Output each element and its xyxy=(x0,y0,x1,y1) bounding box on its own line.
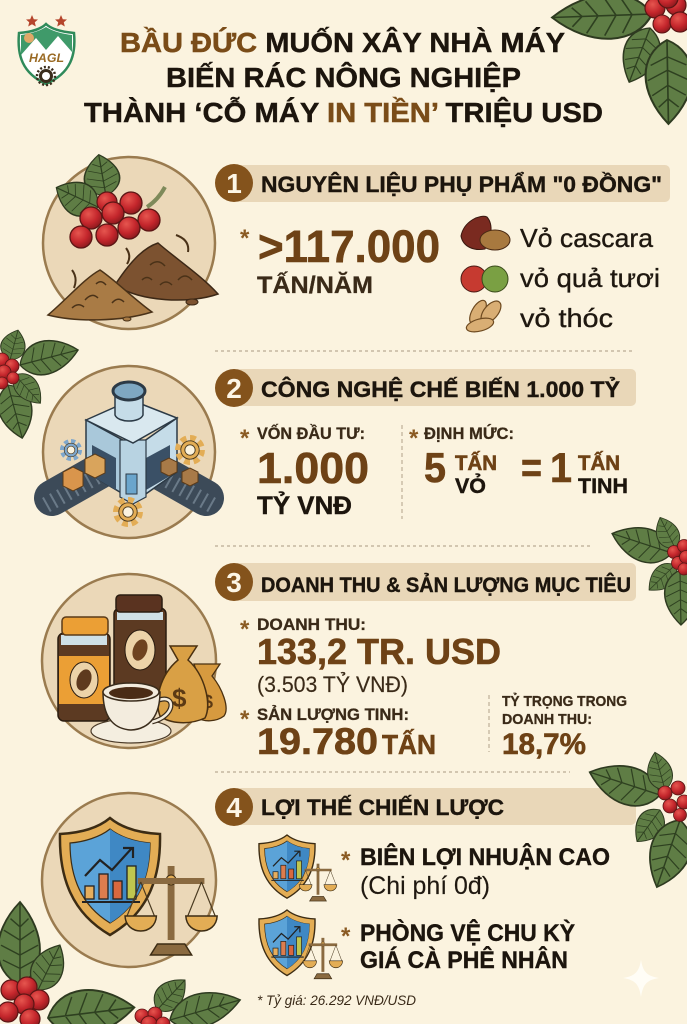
title: THÀNH ‘CỖ MÁY IN TIỀN’ TRIỆU USD xyxy=(84,97,603,128)
stat: revenue share: DOANH THU: xyxy=(502,712,592,728)
stat: conversion ratio: * xyxy=(409,425,419,452)
stat: output: * xyxy=(240,706,250,733)
icon: shield and scale xyxy=(42,793,217,967)
stat: tonnes per year: TẤN/NĂM xyxy=(257,271,373,299)
benefit: cycle defence: * xyxy=(341,923,351,950)
stat: conversion ratio: 5 xyxy=(424,444,446,491)
stat: tonnes per year: * xyxy=(240,225,250,252)
icon: coffee jars, cup and money bags: $ xyxy=(172,683,187,713)
heading bar 4: LỢI THẾ CHIẾN LƯỢC xyxy=(261,795,504,820)
logo wordmark: HAGL xyxy=(29,53,64,65)
stat: tonnes per year xyxy=(240,221,440,299)
list: husk types: vỏ quả tươi xyxy=(520,263,660,293)
stat: conversion ratio: TINH xyxy=(578,475,628,498)
logo: HAGL xyxy=(19,15,74,85)
heading bar 3: DOANH THU & SẢN LƯỢNG MỤC TIÊU xyxy=(261,573,631,597)
heading bar 2: 2 xyxy=(226,373,242,404)
section 4 xyxy=(42,788,636,1008)
list: husk types xyxy=(461,216,660,334)
stat: revenue: * xyxy=(240,616,250,643)
title: BIẾN RÁC NÔNG NGHIỆP xyxy=(166,61,521,93)
stat: conversion ratio xyxy=(409,424,628,498)
benefit: high margin: BIÊN LỢI NHUẬN CAO xyxy=(360,843,610,871)
title xyxy=(84,26,603,128)
stat: investment: VỐN ĐẦU TƯ: xyxy=(257,423,365,443)
section 3 xyxy=(42,563,636,762)
stat: investment xyxy=(240,423,369,520)
icon: sparkle watermark xyxy=(623,960,659,997)
list: husk types: Vỏ cascara xyxy=(520,223,654,253)
section 1 xyxy=(43,152,670,334)
benefit: high margin: (Chi phí 0đ) xyxy=(360,872,490,900)
stat: revenue: 133,2 TR. USD xyxy=(257,631,501,672)
decoration: coffee branch right middle xyxy=(607,513,687,625)
stat: revenue share: 18,7% xyxy=(502,728,586,761)
decoration: coffee branch left middle xyxy=(0,327,82,442)
heading bar 4: 4 xyxy=(226,792,242,823)
stat: tonnes per year: >117.000 xyxy=(258,221,440,272)
decoration: coffee branch top right xyxy=(551,0,687,124)
stat: conversion ratio: TẤN xyxy=(578,452,620,475)
stat: revenue share xyxy=(502,693,627,761)
benefit: cycle defence: GIÁ CÀ PHÊ NHÂN xyxy=(360,946,568,974)
stat: conversion ratio: TẤN xyxy=(455,452,497,475)
icon: coffee jars, cup and money bags: $ xyxy=(203,692,213,712)
heading bar 3: 3 xyxy=(226,567,242,598)
stat: revenue: (3.503 TỶ VNĐ) xyxy=(257,672,408,697)
decoration: coffee branch bottom left xyxy=(0,902,137,1024)
decoration: coffee branch bottom centre xyxy=(135,970,245,1024)
benefit: high margin: * xyxy=(341,847,351,874)
stat: investment: * xyxy=(240,425,250,452)
stat: output: 19.780 xyxy=(257,721,378,762)
stat: investment: TỶ VNĐ xyxy=(257,490,352,520)
stat: conversion ratio: VỎ xyxy=(455,474,486,498)
heading bar 1: 1 xyxy=(226,168,242,199)
heading bar 1 xyxy=(215,164,670,202)
benefit: cycle defence xyxy=(259,910,575,979)
stat: conversion ratio: = xyxy=(521,444,542,491)
title: BẦU ĐỨC MUỐN XÂY NHÀ MÁY xyxy=(120,26,565,58)
stat: revenue share: TỶ TRỌNG TRONG xyxy=(502,693,627,710)
icon: fresh fruit xyxy=(461,266,508,292)
decoration: coffee branch right lower xyxy=(584,749,687,894)
list: husk types: vỏ thóc xyxy=(520,303,613,333)
icon: cascara xyxy=(461,216,510,250)
icon: berries and husk piles xyxy=(43,152,218,329)
section 2 xyxy=(43,366,636,538)
footnote: exchange rate: * Tỷ giá: 26.292 VNĐ/USD xyxy=(257,993,416,1008)
stat: revenue xyxy=(240,615,501,697)
icon: processing machine xyxy=(43,366,215,538)
heading bar 1: NGUYÊN LIỆU PHỤ PHẨM "0 ĐỒNG" xyxy=(261,172,662,197)
benefit: high margin xyxy=(259,835,610,901)
heading bar 4 xyxy=(215,788,636,826)
stat: investment: 1.000 xyxy=(257,444,369,493)
benefit: cycle defence: PHÒNG VỆ CHU KỲ xyxy=(360,919,575,947)
heading bar 2: CÔNG NGHỆ CHẾ BIẾN 1.000 TỶ xyxy=(261,377,620,402)
icon: coffee jars, cup and money bags xyxy=(42,574,226,748)
stat: output: SẢN LƯỢNG TINH: xyxy=(257,705,409,724)
stat: output xyxy=(240,705,436,762)
stat: revenue: DOANH THU: xyxy=(257,615,366,634)
stat: conversion ratio: 1 xyxy=(550,444,572,491)
icon: parchment husks xyxy=(465,298,505,334)
stat: output: TẤN xyxy=(382,729,436,760)
heading bar 2 xyxy=(215,369,636,407)
heading bar 3 xyxy=(215,563,636,601)
stat: conversion ratio: ĐỊNH MỨC: xyxy=(424,424,514,443)
